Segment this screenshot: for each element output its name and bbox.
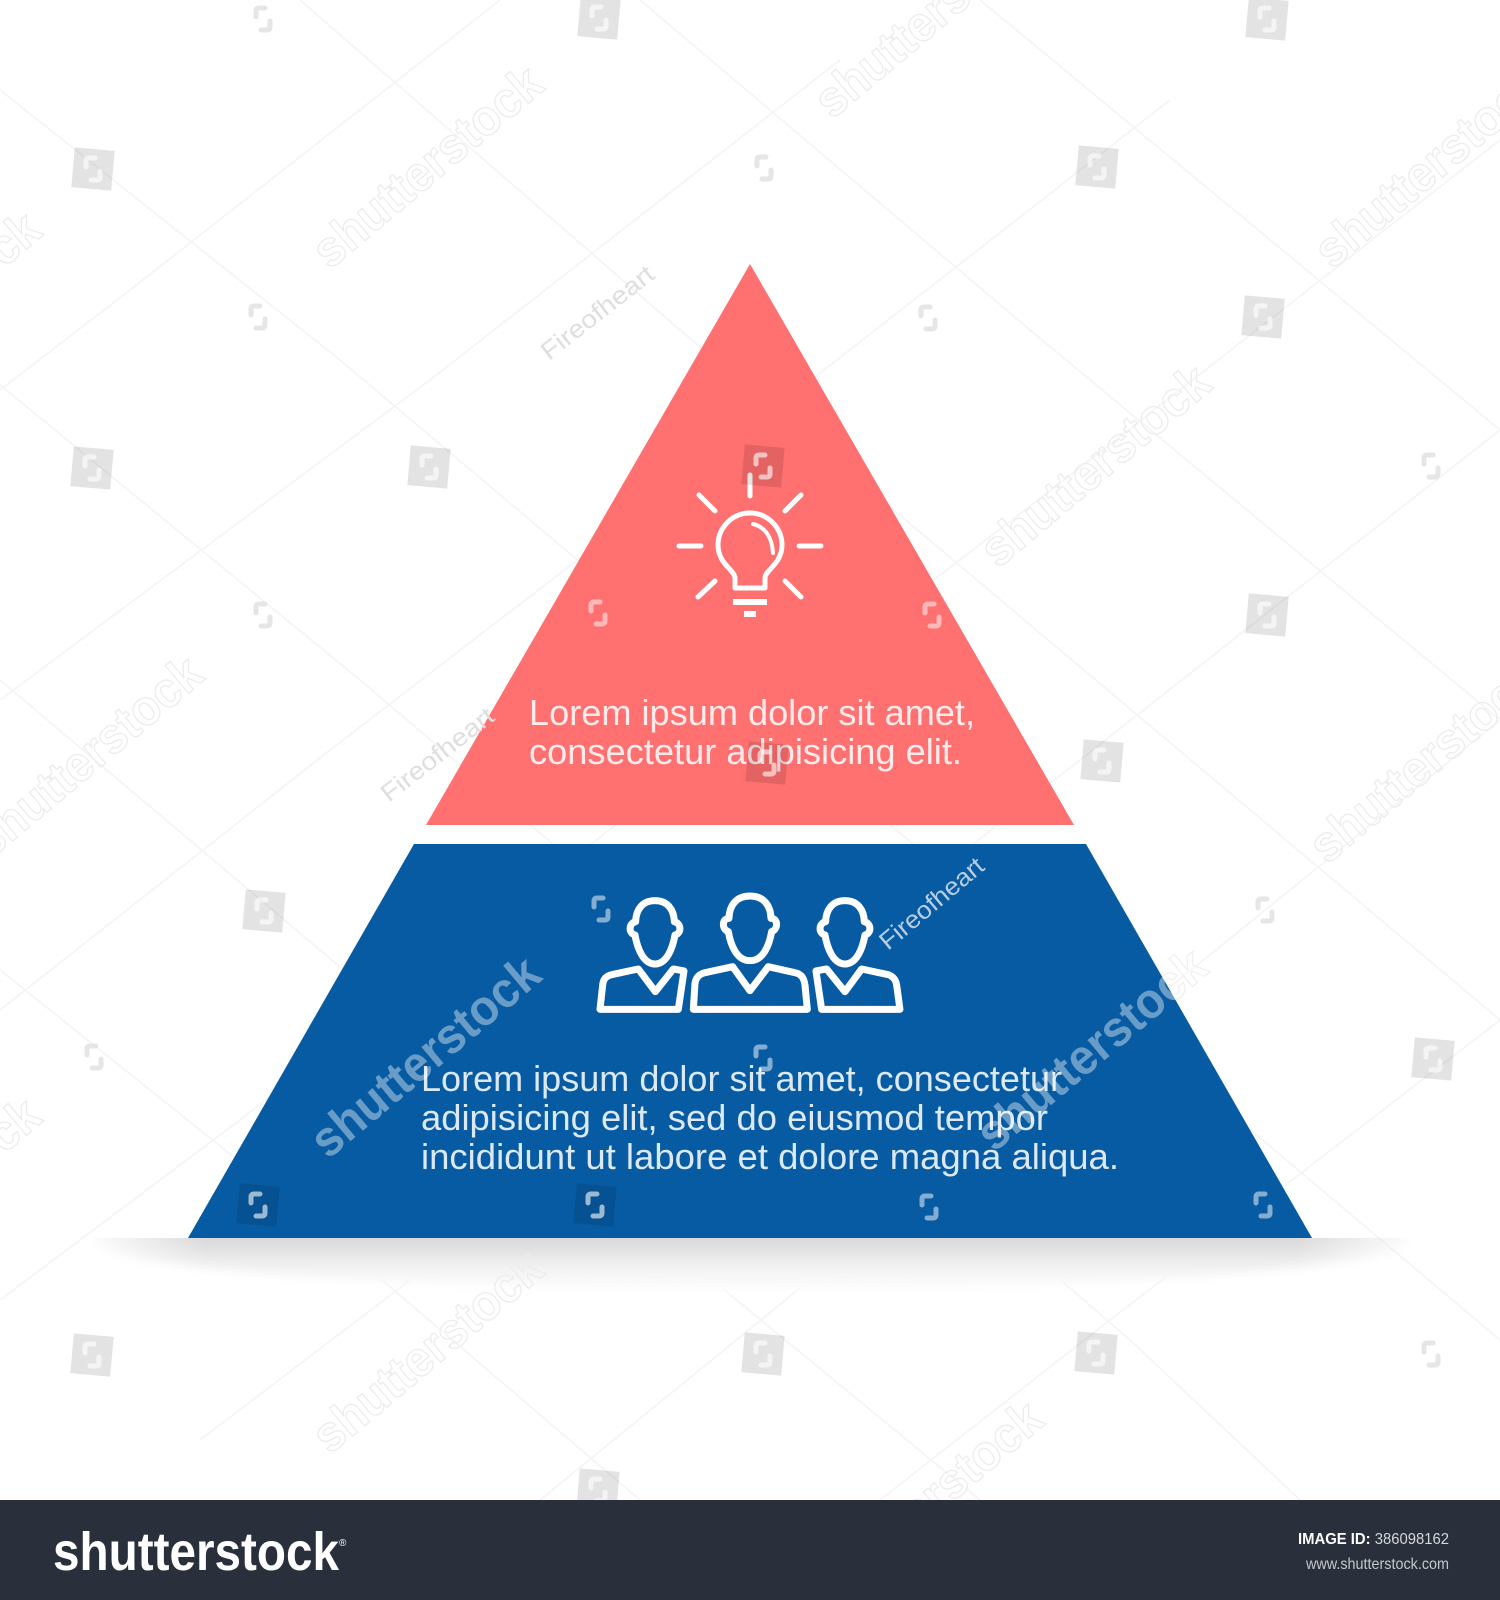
footer image details — [1298, 1531, 1449, 1573]
watermark wordmark behind pyramid: shutterstock — [965, 937, 1217, 1161]
watermark: Fireofheart credits: Fireofheart — [535, 260, 660, 366]
pyramid base shadow — [112, 1238, 1388, 1278]
icon: three people — [600, 896, 900, 1009]
watermark wordmarks: shutterstock — [969, 353, 1221, 577]
text: top tier description — [529, 692, 975, 772]
text: top tier description: consectetur adipisicing elit. — [529, 731, 962, 772]
text: bottom tier description: incididunt ut labore et dolore magna aliqua. — [421, 1136, 1119, 1177]
watermark wordmarks: shutterstock — [299, 944, 551, 1168]
text: top tier description: Lorem ipsum dolor sit amet, — [529, 692, 975, 733]
watermark: Fireofheart credits: Fireofheart — [375, 702, 500, 808]
footer logo: shutterstock — [53, 1522, 340, 1582]
footer image details: www.shutterstock.com — [1305, 1556, 1449, 1573]
text: bottom tier description: Lorem ipsum dolor sit amet, consectetur — [421, 1058, 1062, 1099]
watermark wordmarks: shutterstock — [301, 54, 553, 278]
text: bottom tier description — [421, 1058, 1119, 1177]
footer image details: IMAGE ID: 386098162 — [1298, 1531, 1449, 1548]
text: bottom tier description: adipisicing elit, sed do eiusmod tempor — [421, 1097, 1048, 1138]
footer bar — [0, 1500, 1500, 1600]
footer logo: ® — [339, 1538, 347, 1549]
watermark wordmarks: shutterstock — [301, 1239, 553, 1463]
panel: pyramid bottom trapezoid — [188, 844, 1312, 1238]
panel: pyramid top triangle — [426, 264, 1074, 825]
watermark: Fireofheart credits — [375, 260, 990, 956]
watermark: Fireofheart credits: Fireofheart — [874, 852, 990, 956]
icon: light bulb — [679, 475, 821, 614]
watermark wordmarks: shutterstock — [965, 937, 1217, 1161]
